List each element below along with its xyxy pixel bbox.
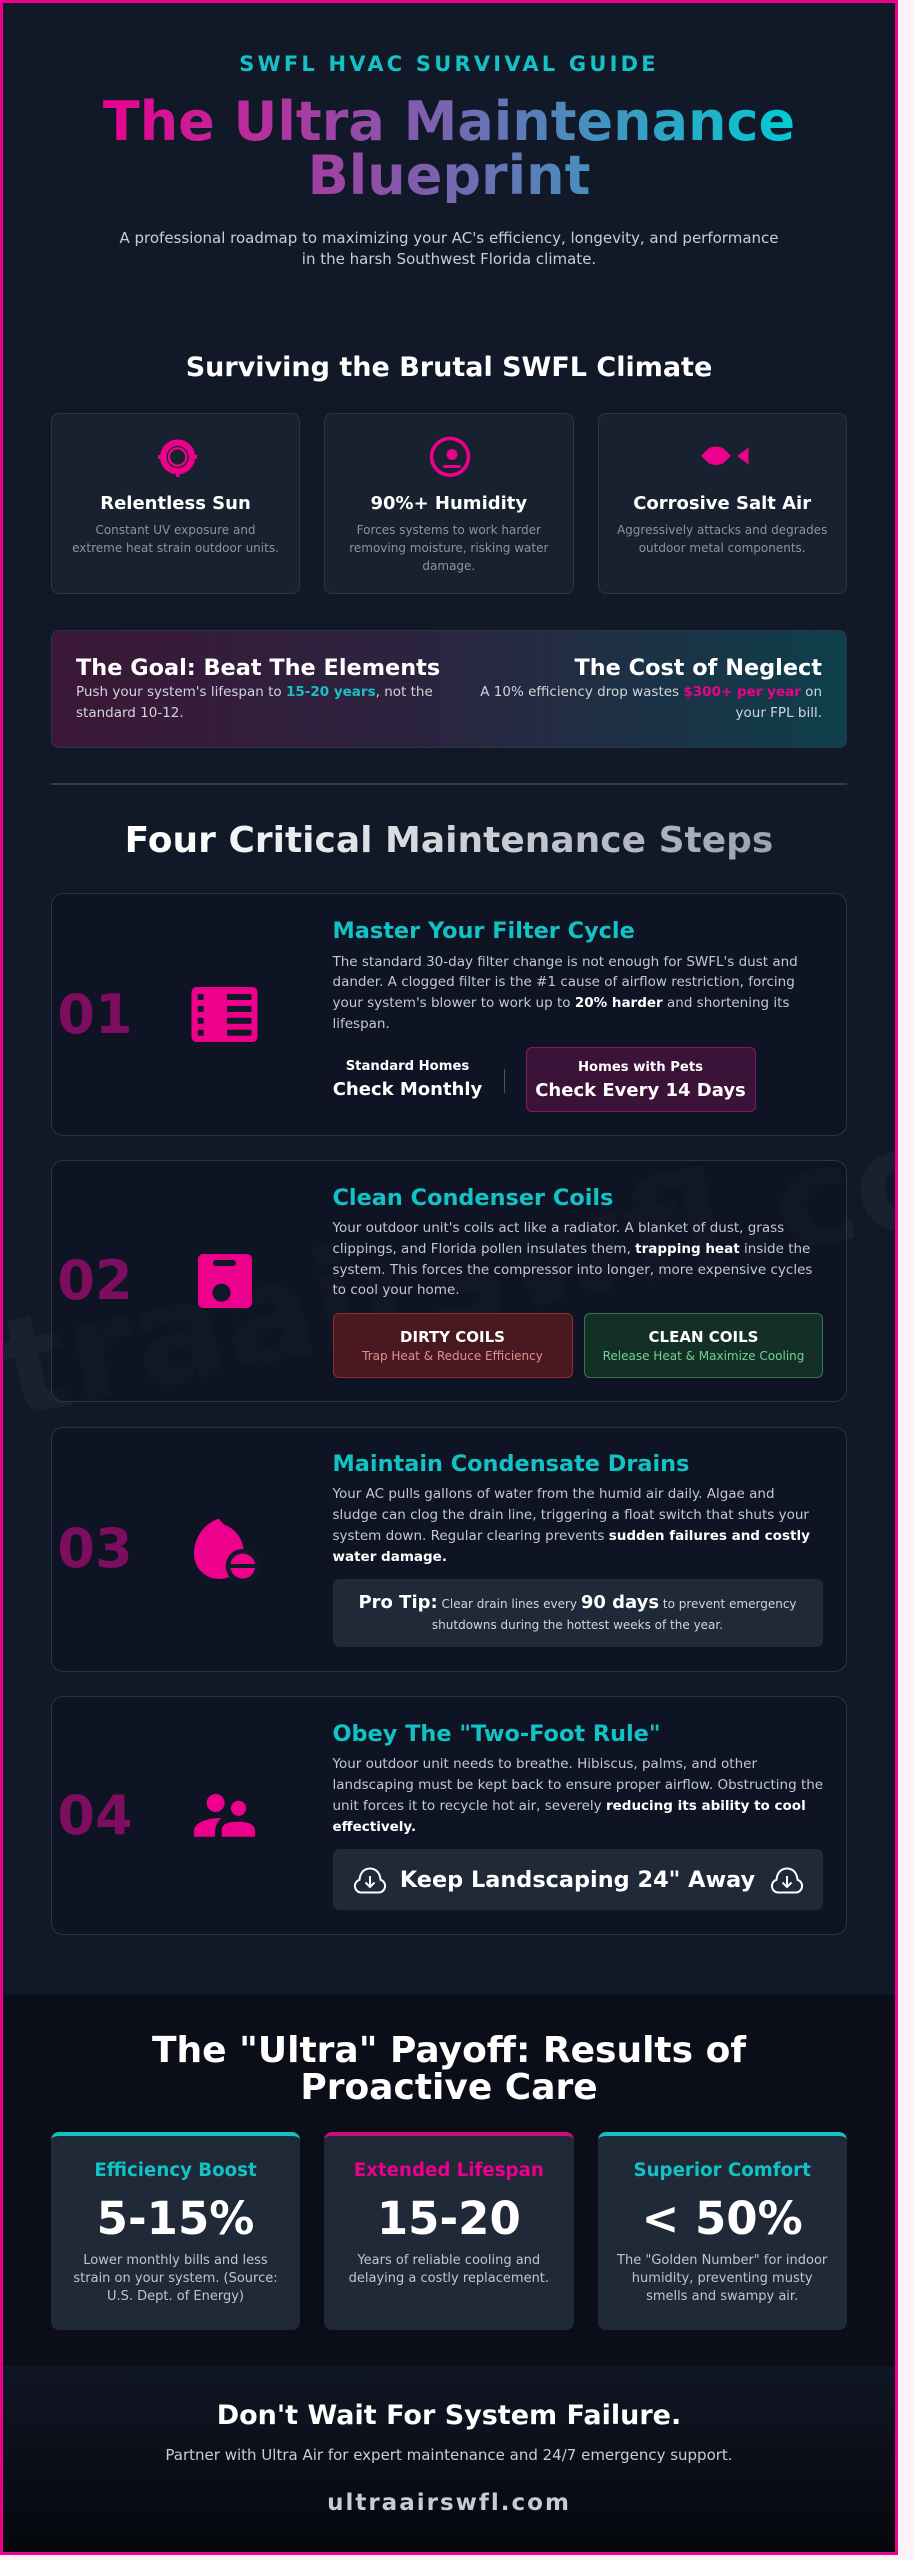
cost heading: The Cost of Neglect	[574, 655, 822, 681]
result text: delaying a costly replacement.	[349, 2271, 549, 2286]
step 2 title: Clean Condenser Coils	[332, 1184, 613, 1210]
payoff heading: The "Ultra" Payoff: Results of	[152, 2030, 746, 2071]
step 1 text: your system's blower to work up to 20% harder and shortening its	[332, 995, 789, 1011]
step 2 text	[332, 1220, 812, 1298]
clean coils box	[584, 1313, 823, 1378]
footer heading: Don't Wait For System Failure.	[217, 2400, 681, 2431]
step number 04: 04	[57, 1784, 133, 1847]
card text: Constant UV exposure and	[95, 523, 256, 537]
goal text	[76, 684, 433, 721]
card title: 90%+ Humidity	[370, 493, 527, 514]
step 2 text: to cool your home.	[332, 1282, 460, 1298]
result text: humidity, preventing musty	[632, 2271, 813, 2286]
step number 02: 02	[57, 1249, 133, 1312]
dirty label: DIRTY COILS	[400, 1328, 505, 1346]
pets stat box	[526, 1046, 756, 1112]
result label: Superior Comfort	[634, 2160, 811, 2181]
result value: 5-15%	[97, 2192, 254, 2245]
result card: efficiency	[51, 2132, 300, 2330]
icon: cloud download left	[354, 1868, 386, 1894]
panel: salt air	[598, 413, 847, 594]
result text: smells and swampy air.	[646, 2289, 798, 2304]
card text: Aggressively attacks and degrades	[617, 523, 827, 537]
result card: comfort	[598, 2132, 847, 2330]
icon: condenser unit	[198, 1254, 252, 1308]
step 3 text: system down. Regular clearing prevents sudden failures and costly	[332, 1528, 810, 1544]
step 4 text	[332, 1756, 823, 1834]
step 1 text: dander. A clogged filter is the #1 cause of airflow restriction, forcing	[332, 974, 795, 990]
panel: step 3	[51, 1426, 847, 1672]
card text	[349, 523, 548, 573]
icon: people	[194, 1794, 255, 1837]
goal text: Push your system's lifespan to 15-20 years, not the	[76, 684, 433, 700]
result text: Years of reliable cooling and	[357, 2253, 540, 2268]
icon: humidity gauge	[430, 436, 470, 477]
card text	[617, 523, 827, 555]
icon: filter	[192, 987, 258, 1042]
title: Blueprint	[308, 144, 590, 207]
card title: Corrosive Salt Air	[633, 493, 811, 514]
step 3 text: water damage.	[332, 1549, 447, 1565]
result text: U.S. Dept. of Energy)	[107, 2289, 244, 2304]
result text: Lower monthly bills and less	[83, 2253, 268, 2268]
step number 03: 03	[57, 1517, 133, 1580]
result text	[616, 2253, 828, 2304]
panel: step 2	[51, 1160, 847, 1402]
eyebrow: SWFL HVAC SURVIVAL GUIDE	[239, 52, 659, 76]
panel: footer	[0, 2366, 898, 2555]
callout text: Keep Landscaping 24" Away	[400, 1867, 755, 1893]
subtitle: in the harsh Southwest Florida climate.	[302, 250, 596, 268]
pro tip text	[358, 1592, 797, 1632]
result text: strain on your system. (Source:	[73, 2271, 278, 2286]
result text	[73, 2253, 278, 2304]
card text: outdoor metal components.	[639, 541, 806, 555]
step 2 text: system. This forces the compressor into longer, more expensive cycles	[332, 1262, 812, 1278]
step number 01: 01	[57, 983, 133, 1046]
payoff heading: Proactive Care	[300, 2067, 598, 2108]
result card: lifespan	[324, 2132, 574, 2330]
icon: cloud download right	[770, 1868, 804, 1894]
step 1 title: Master Your Filter Cycle	[332, 918, 635, 944]
standard label: Standard Homes	[346, 1059, 469, 1074]
panel: humidity	[324, 413, 574, 594]
step 3 text: Your AC pulls gallons of water from the humid air daily. Algae and	[332, 1486, 775, 1502]
subtitle: A professional roadmap to maximizing your AC's efficiency, longevity, and performance	[119, 229, 778, 247]
cost text: your FPL bill.	[736, 705, 822, 721]
step 4 text: Your outdoor unit needs to breathe. Hibiscus, palms, and other	[332, 1756, 757, 1772]
goal heading: The Goal: Beat The Elements	[76, 655, 440, 681]
step 2 text: Your outdoor unit's coils act like a radiator. A blanket of dust, grass	[332, 1220, 784, 1236]
footer text: Partner with Ultra Air for expert maintenance and 24/7 emergency support.	[165, 2446, 733, 2464]
icon: drain drop	[194, 1518, 255, 1579]
pets label: Homes with Pets	[578, 1060, 703, 1074]
step 3 text: sludge can clog the drain line, triggering a float switch that shuts your	[332, 1507, 809, 1523]
heading: four steps: Four Critical Maintenance Steps	[125, 820, 773, 861]
title	[99, 95, 799, 203]
payoff heading	[152, 2030, 746, 2108]
heading: climate: Surviving the Brutal SWFL Climate	[186, 352, 712, 383]
card text: damage.	[422, 559, 475, 573]
card title: Relentless Sun	[100, 493, 251, 514]
website: ultraairswfl.com	[327, 2490, 571, 2516]
card text	[72, 523, 279, 555]
pro tip text: shutdowns during the hottest weeks of the year.	[432, 1618, 723, 1632]
panel: step 4	[51, 1696, 847, 1935]
step 4 text: landscaping must be kept back to ensure proper airflow. Obstructing the	[332, 1776, 823, 1792]
standard homes stat	[333, 1059, 482, 1100]
step 4 title: Obey The "Two-Foot Rule"	[332, 1721, 661, 1747]
subtitle	[119, 229, 778, 268]
card text: extreme heat strain outdoor units.	[72, 541, 279, 555]
cost text: A 10% efficiency drop wastes $300+ per year on	[480, 684, 822, 700]
panel: payoff section	[0, 1995, 898, 2366]
card text: removing moisture, risking water	[349, 541, 548, 555]
title: The Ultra Maintenance	[103, 90, 795, 153]
panel: relentless sun	[51, 413, 300, 594]
step 3 title: Maintain Condensate Drains	[332, 1451, 689, 1477]
pro tip text: Pro Tip: Clear drain lines every 90 days to prevent emergency	[358, 1592, 797, 1613]
step 3 text	[332, 1486, 810, 1565]
pets value: Check Every 14 Days	[535, 1080, 746, 1100]
step 1 text: lifespan.	[332, 1016, 390, 1032]
step 4 text: unit forces it to recycle hot air, severely reducing its ability to cool	[332, 1798, 806, 1814]
clean text: Release Heat & Maximize Cooling	[603, 1349, 804, 1363]
cost text	[480, 684, 822, 721]
icon: salt crystal	[701, 446, 748, 465]
standard value: Check Monthly	[333, 1079, 482, 1100]
result text	[349, 2253, 549, 2286]
step 1 text	[332, 954, 798, 1032]
result value: < 50%	[642, 2192, 803, 2245]
goal text: standard 10-12.	[76, 705, 184, 721]
banner: goal and cost	[51, 630, 847, 748]
step 1 text: The standard 30-day filter change is not enough for SWFL's dust and	[332, 954, 798, 970]
icon: sun	[158, 440, 197, 477]
result label: Extended Lifespan	[354, 2160, 544, 2181]
step 2 text: clippings, and Florida pollen insulates them, trapping heat inside the	[332, 1241, 810, 1257]
pro tip box	[332, 1579, 822, 1647]
step 4 text: effectively.	[332, 1818, 416, 1834]
dirty coils box	[332, 1313, 572, 1378]
result text: The "Golden Number" for indoor	[617, 2253, 827, 2268]
result value: 15-20	[377, 2192, 521, 2245]
card text: Forces systems to work harder	[357, 523, 541, 537]
result label: Efficiency Boost	[94, 2160, 257, 2181]
clean label: CLEAN COILS	[649, 1328, 758, 1346]
landscaping callout	[332, 1849, 822, 1910]
panel: step 1	[51, 893, 847, 1136]
dirty text: Trap Heat & Reduce Efficiency	[362, 1349, 543, 1363]
